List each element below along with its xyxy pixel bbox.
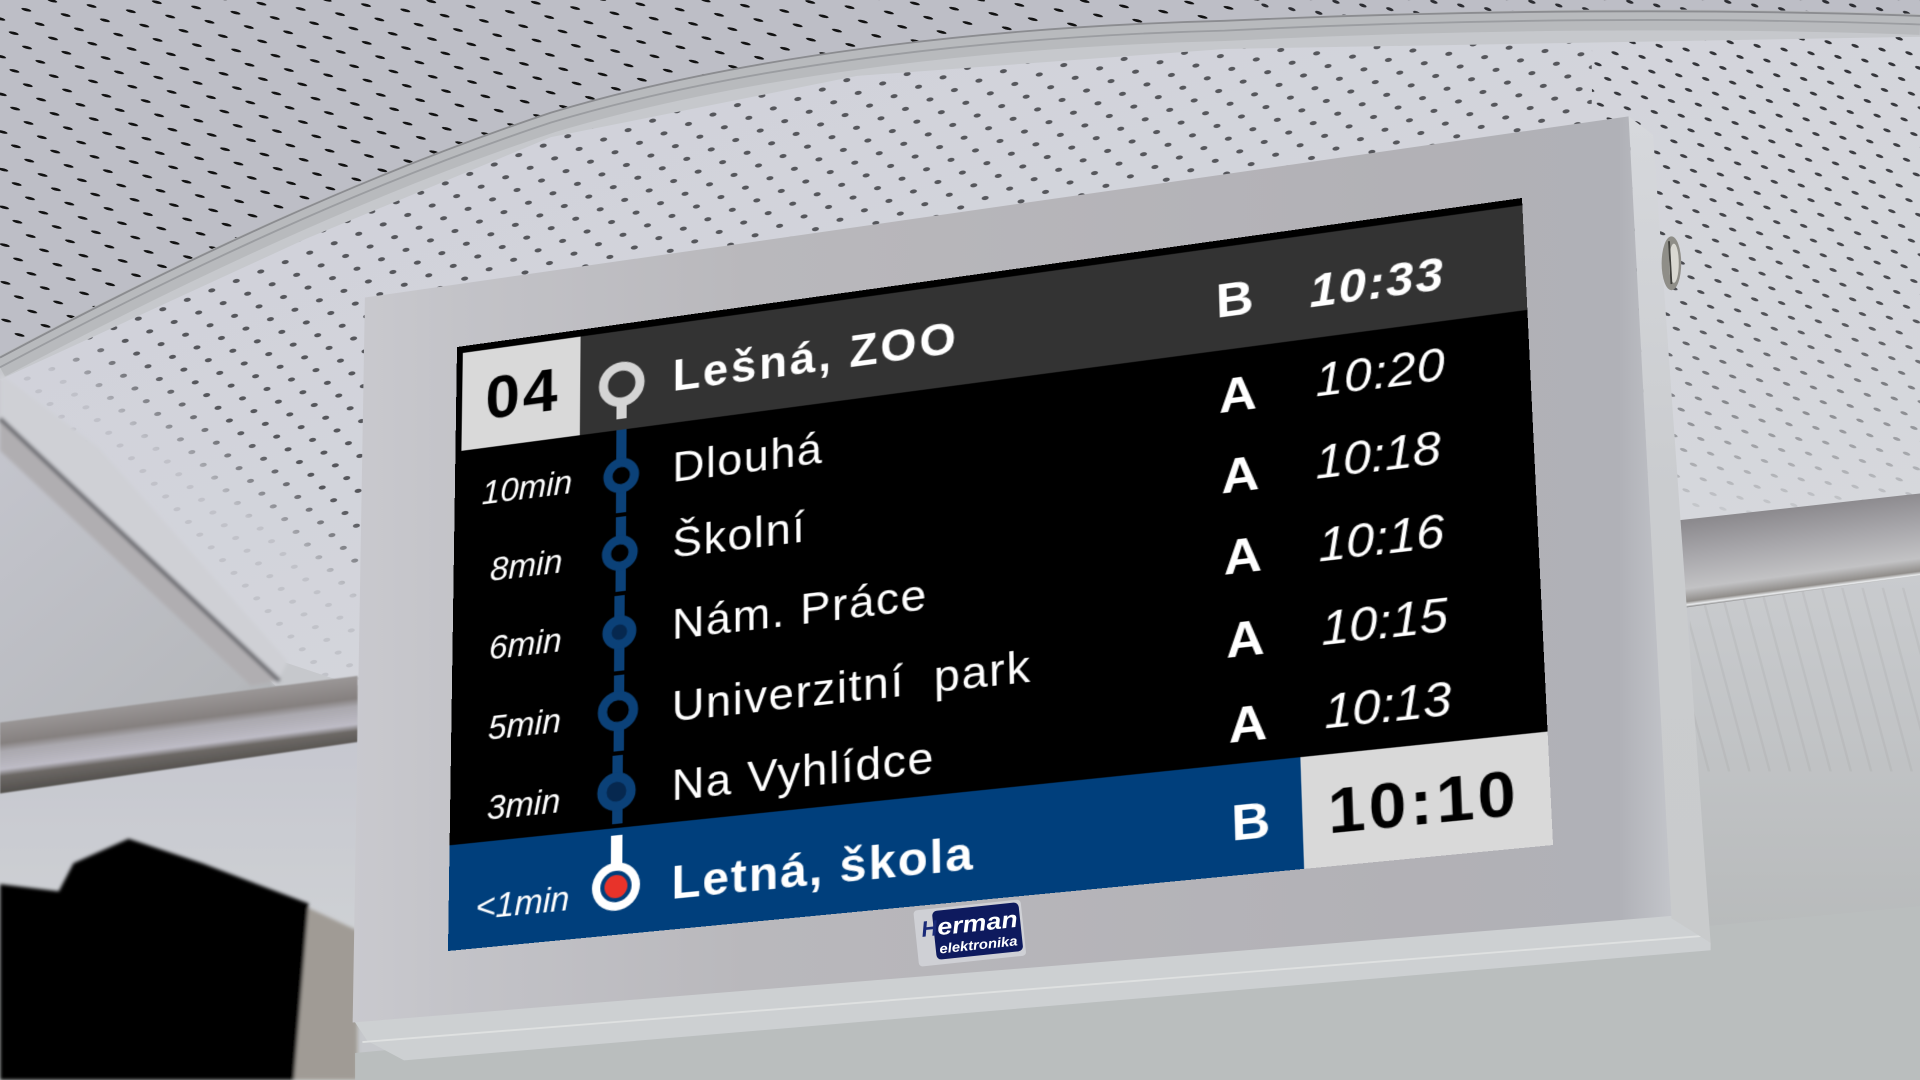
manufacturer logo sticker: H bbox=[920, 915, 940, 942]
dark seat silhouette bbox=[0, 839, 358, 1080]
zone: A row 3: A bbox=[1223, 525, 1263, 585]
stop name: Univerzitní park: Univerzitní park bbox=[672, 642, 1032, 732]
zone: A row 1: A bbox=[1218, 364, 1257, 423]
current stop bar bbox=[448, 757, 1304, 951]
manufacturer logo sticker: elektronika bbox=[939, 933, 1019, 956]
zone: A row 2: A bbox=[1220, 444, 1260, 504]
display casing bottom lip bbox=[353, 912, 1711, 1060]
arrival time: 10:13: 10:13 bbox=[1323, 672, 1453, 739]
stop name: Školní: Školní bbox=[672, 503, 806, 568]
stop name: Nám. Práce: Nám. Práce bbox=[672, 570, 928, 649]
line number: 04 bbox=[485, 355, 561, 433]
wall beneath display bbox=[355, 906, 1920, 1080]
minutes: 6min: 6min bbox=[489, 621, 562, 667]
curved ceiling rail bbox=[0, 11, 1920, 367]
left handrail bbox=[0, 676, 358, 793]
arrival time: 10:33: 10:33 bbox=[1308, 249, 1446, 318]
display casing right side bbox=[1629, 116, 1711, 943]
display casing front face bbox=[353, 116, 1671, 1022]
diagonal ceiling beam bbox=[0, 373, 288, 686]
zone: A row 5: A bbox=[1228, 692, 1268, 754]
minutes: 5min: 5min bbox=[488, 701, 561, 747]
zone: A row 4: A bbox=[1225, 608, 1265, 669]
zone: B current: B bbox=[1230, 790, 1271, 852]
header bar bbox=[580, 205, 1527, 435]
zone: B terminus: B bbox=[1215, 269, 1254, 328]
arrival time: 10:20: 10:20 bbox=[1314, 339, 1447, 407]
perforated lower ceiling panel bbox=[6, 37, 1920, 685]
arrival time: 10:16: 10:16 bbox=[1317, 505, 1446, 572]
manufacturer logo sticker bbox=[913, 899, 1026, 967]
line number box bbox=[461, 337, 581, 451]
current time box bbox=[1300, 732, 1553, 869]
display screen bbox=[448, 198, 1553, 951]
minutes: 10min: 10min bbox=[482, 463, 572, 511]
terminus stop name: Lešná, ZOO bbox=[673, 313, 959, 401]
minutes: under 1min: <1min bbox=[476, 879, 570, 926]
stop name: Na Vyhlídce: Na Vyhlídce bbox=[672, 732, 935, 811]
perforated upper ceiling panel bbox=[0, 0, 1920, 367]
arrival time: 10:18: 10:18 bbox=[1314, 422, 1442, 489]
current time: 10:10 bbox=[1327, 757, 1521, 848]
minutes: 8min: 8min bbox=[490, 542, 563, 588]
right lower wall bbox=[1690, 576, 1920, 1080]
current stop name: Letná, škola bbox=[671, 825, 975, 909]
lower wall behind seat bbox=[0, 735, 358, 1080]
manufacturer logo sticker: erman bbox=[936, 906, 1019, 940]
route line diagram bbox=[592, 360, 646, 912]
right wall ribs bbox=[1690, 588, 1920, 771]
arrival time: 10:15: 10:15 bbox=[1320, 589, 1449, 656]
minutes: 3min: 3min bbox=[487, 781, 560, 827]
right handrail bbox=[1678, 493, 1920, 609]
left wall bbox=[0, 431, 355, 735]
side screw bbox=[1662, 236, 1681, 290]
stop name: Dlouhá: Dlouhá bbox=[672, 424, 824, 492]
